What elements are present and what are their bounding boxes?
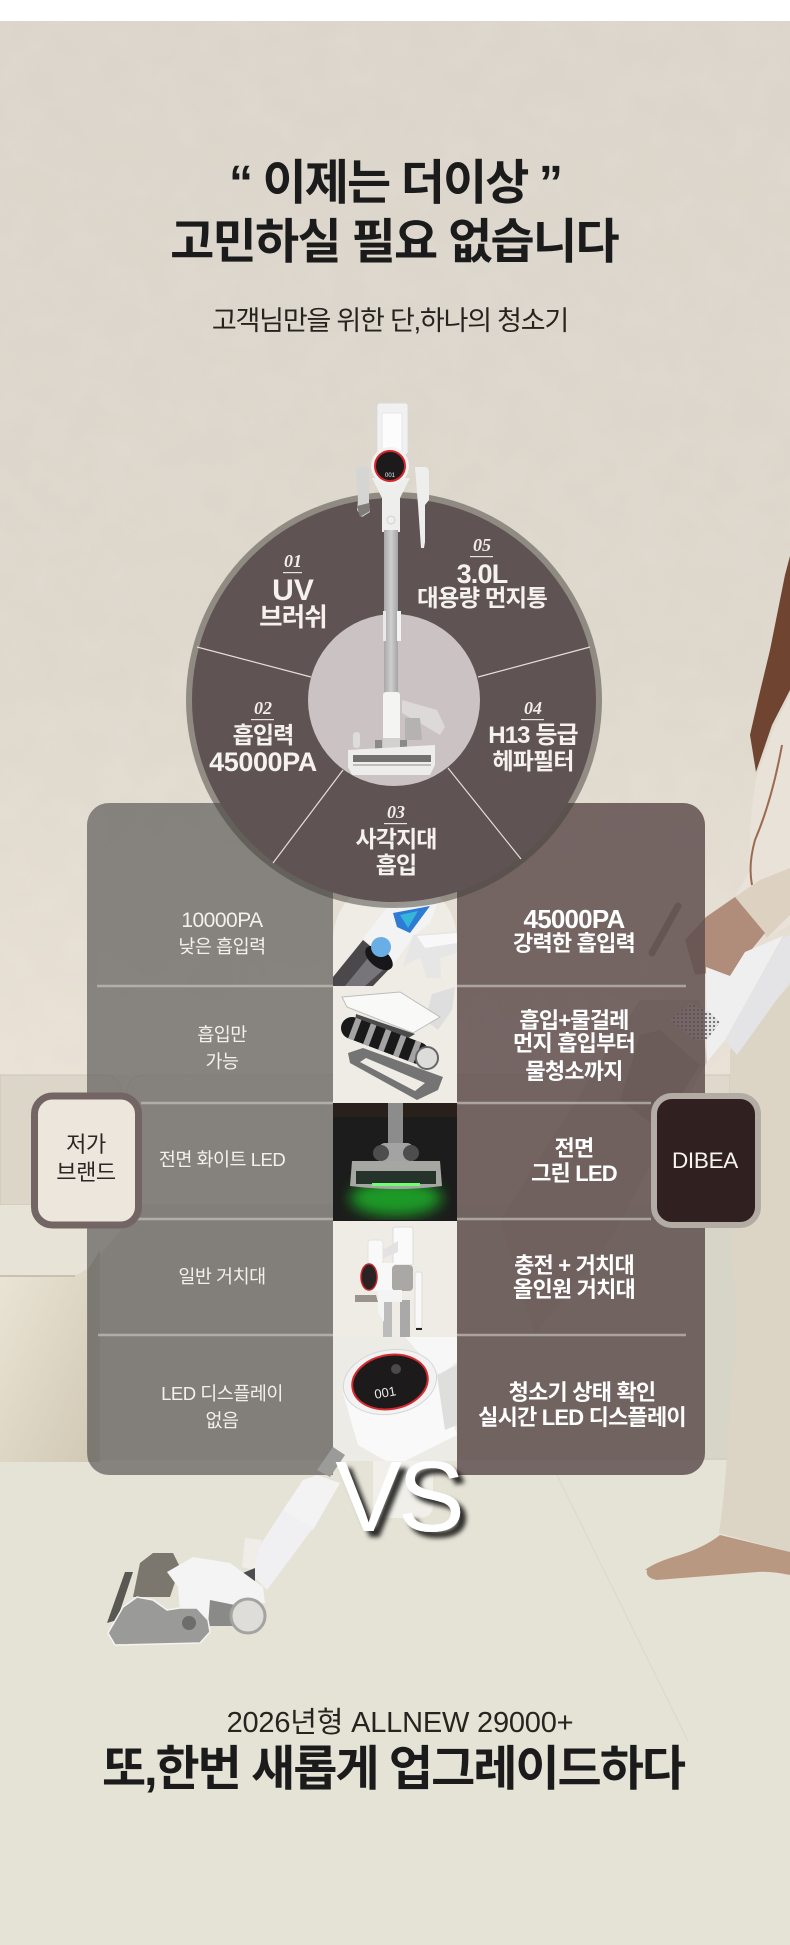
brand badge: DIBEA [654,1096,758,1225]
low-cost brand feature texts: 없음 [205,1410,239,1431]
comparison panel [87,803,705,1475]
photo strip: LED display [333,1337,457,1466]
feature 01: UV brush [259,551,327,632]
feature 02: suction: 45000PA [209,747,317,777]
feature 02: suction [209,698,317,777]
feature 04: HEPA filter [488,698,579,774]
photo strip: LED display: 001 [373,1383,397,1402]
upright vacuum product: 001 [385,473,396,479]
low-cost brand feature texts [159,909,285,1431]
bottom subheading: 2026년형 ALLNEW 29000+ [227,1706,573,1739]
low-cost brand feature texts: 10000PA [181,909,263,932]
wheel ring [186,492,602,908]
low-cost brand feature texts: 흡입만 [197,1024,247,1045]
subtitle: 고객님만을 위한 단,하나의 청소기 [212,306,568,336]
photo strip: all-in-one stand [333,1221,457,1340]
lower vacuum photo strip tail [373,1461,433,1518]
brand badge: DIBEA: DIBEA [672,1148,738,1173]
feature 02: suction: 02 [254,698,272,718]
feature 04: HEPA filter: 헤파필터 [492,748,574,774]
title: 고민하실 필요 없습니다 [170,216,619,269]
feature 01: UV brush: 브러쉬 [259,604,327,632]
upright vacuum product [348,403,445,775]
feature 03: corner suction: 흡입 [376,852,416,878]
brand badge: low-cost brand [34,1096,138,1225]
vacuum cleaner on the floor [107,1447,345,1645]
DIBEA feature texts: 충전 + 거치대 [514,1253,634,1278]
feature 03: corner suction [355,802,437,878]
brand badge: low-cost brand: 브랜드 [56,1160,116,1185]
VS mark: VS [335,1441,461,1553]
low-cost brand feature texts: 가능 [205,1051,239,1072]
DIBEA feature texts: 실시간 LED 디스플레이 [478,1405,686,1430]
wheel spokes [197,647,590,863]
feature 05: dust bin: 05 [473,535,491,555]
photo strip: suction motor [333,897,457,986]
feature 05: dust bin [417,535,547,611]
feature 05: dust bin: 대용량 먼지통 [417,585,547,611]
DIBEA feature texts: 전면 [555,1136,593,1161]
DIBEA feature texts: 청소기 상태 확인 [509,1380,655,1405]
title: “ 이제는 더이상 ” [229,157,561,210]
feature 01: UV brush: 01 [284,551,302,571]
DIBEA feature texts: 먼지 흡입부터 [513,1031,635,1056]
feature 02: suction: 흡입력 [233,722,293,748]
bottom heading: 또,한번 새롭게 업그레이드하다 [102,1743,686,1796]
wheel disc [192,498,596,902]
low-cost brand feature texts: 전면 화이트 LED [159,1149,285,1170]
title [170,157,619,269]
photo strip: wet mop brush [333,986,457,1103]
feature 03: corner suction: 03 [387,802,405,822]
row dividers [97,986,686,1335]
wheel centre [308,614,480,786]
DIBEA feature texts: 강력한 흡입력 [513,931,635,956]
DIBEA feature texts: 물청소까지 [525,1059,623,1084]
panel: DIBEA column [457,803,705,1475]
person: hair, sweater, hand, dress and foot [500,556,790,1580]
photo strip: green LED head [333,1103,457,1221]
panel: low-cost brand column [87,803,333,1475]
DIBEA feature texts: 그린 LED [531,1161,617,1186]
feature wheel [186,492,602,908]
low-cost brand feature texts: 낮은 흡입력 [178,936,266,957]
feature 04: HEPA filter: 04 [524,698,542,718]
low-cost brand feature texts: 일반 거치대 [178,1266,266,1287]
feature 04: HEPA filter: H13 등급 [488,722,579,749]
brand badge: low-cost brand: 저가 [66,1132,106,1157]
DIBEA feature texts: 흡입+물걸레 [519,1008,629,1033]
DIBEA feature texts: 45000PA [524,904,625,934]
DIBEA feature texts [478,904,686,1430]
feature 03: corner suction: 사각지대 [355,826,437,852]
DIBEA feature texts: 올인원 거치대 [513,1277,635,1302]
low-cost brand feature texts: LED 디스플레이 [161,1383,283,1404]
feature 05: dust bin: 3.0L [457,559,508,589]
feature 01: UV brush: UV [272,574,314,607]
